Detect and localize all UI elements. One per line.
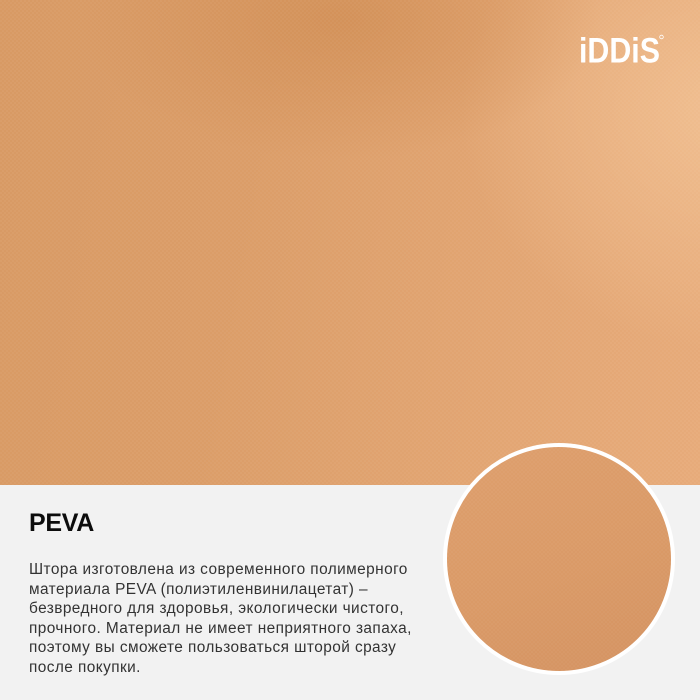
- text block: material description: прочного. Материал не имеет неприятного запаха,: [29, 620, 412, 637]
- text block: material description: безвредного для здоровья, экологически чистого,: [29, 600, 404, 617]
- circle: fabric close-up: [443, 443, 675, 675]
- text block: material description: материала PEVA (полиэтиленвинилацетат) –: [29, 581, 368, 598]
- text block: material description: Штора изготовлена из современного полимерного: [29, 561, 408, 578]
- text block: material description: после покупки.: [29, 659, 141, 676]
- text block: material description: [29, 561, 412, 676]
- photo: fabric texture background: [0, 0, 700, 485]
- heading: PEVA: PEVA: [29, 509, 94, 537]
- text block: material description: поэтому вы сможете пользоваться шторой сразу: [29, 639, 396, 656]
